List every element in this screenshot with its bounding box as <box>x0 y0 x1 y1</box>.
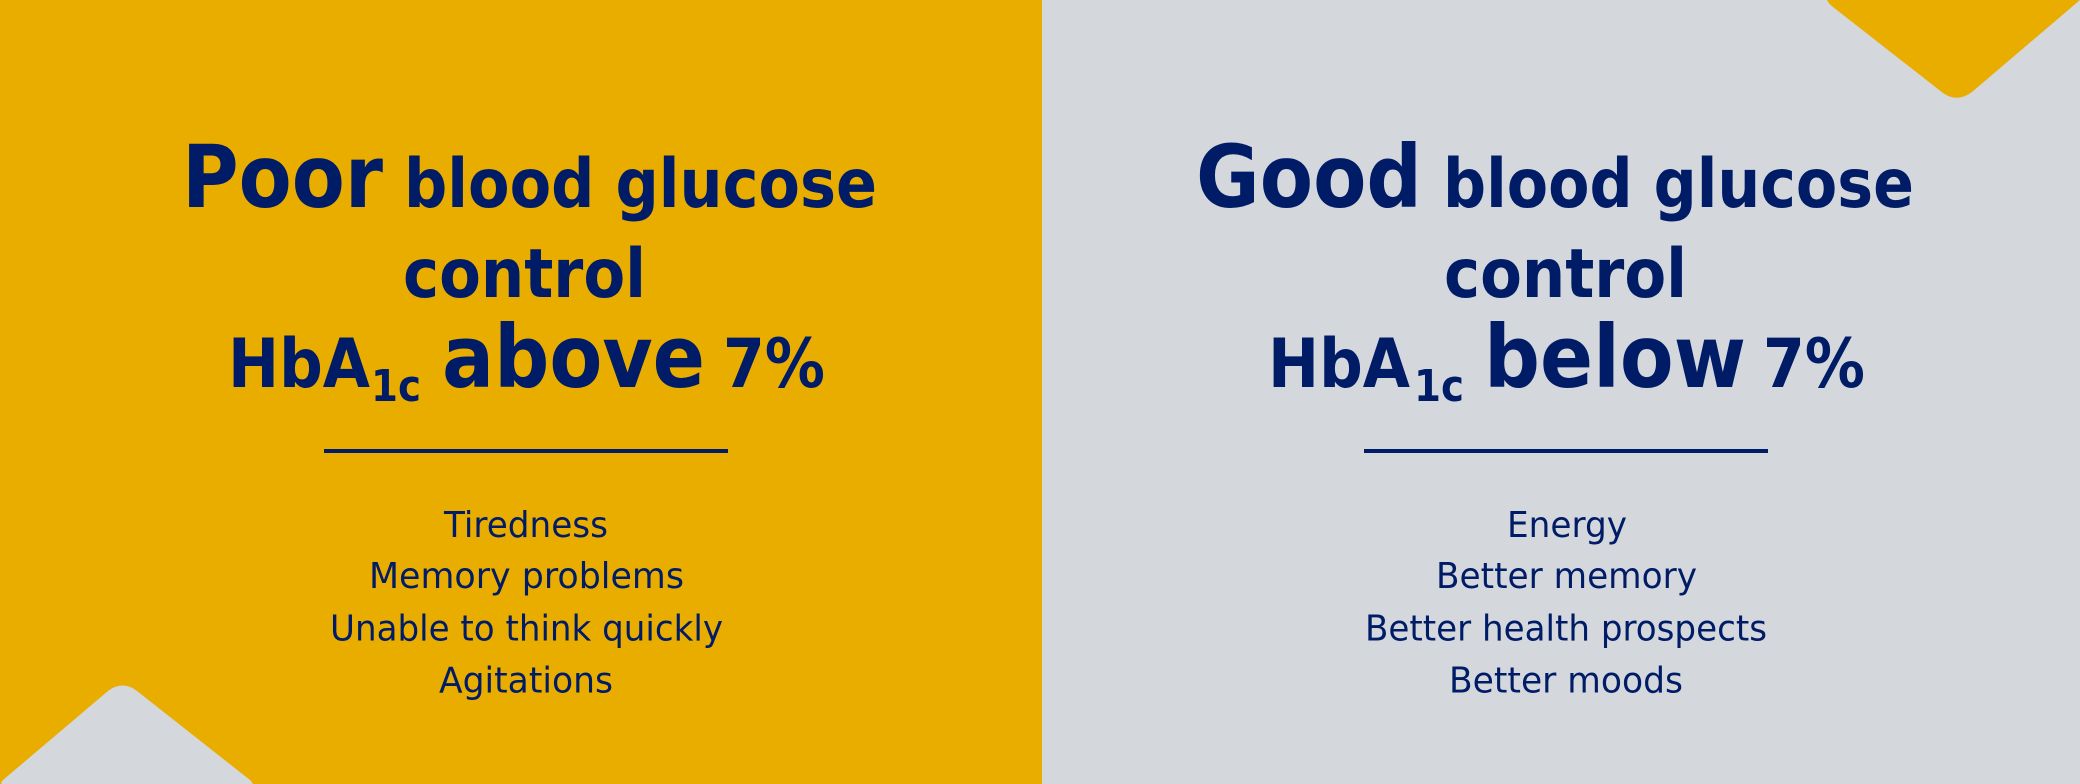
heading: good control: HbA <box>1268 324 1410 403</box>
benefit list: good control: Energy <box>1507 505 1627 546</box>
heading: poor control: control <box>403 234 646 313</box>
heading: poor control: above <box>442 308 705 408</box>
heading: good control: 1c <box>1414 361 1464 412</box>
panel background: gold <box>0 0 1042 784</box>
heading: poor control: 1c <box>371 361 421 412</box>
heading: good control <box>1196 128 1914 412</box>
heading: poor control: 7% <box>723 324 825 403</box>
symptom list: poor control: Memory problems <box>369 556 684 597</box>
heading: good control: 7% <box>1763 324 1865 403</box>
heading: good control: control <box>1444 234 1687 313</box>
heading: good control: blood glucose <box>1443 144 1914 223</box>
panel: poor blood glucose control <box>0 0 1042 784</box>
heading: poor control: Poor <box>182 128 383 228</box>
symptom list: poor control: Agitations <box>439 660 613 702</box>
symptom list: poor control: Unable to think quickly <box>330 608 723 650</box>
heading: poor control <box>182 128 877 412</box>
decorative corner shape: gold chevron <box>1827 0 2080 98</box>
panel background: grey <box>1042 0 2080 784</box>
heading: good control: below <box>1484 308 1746 408</box>
heading: good control: Good <box>1196 128 1422 228</box>
panel: good blood glucose control <box>1042 0 2080 784</box>
divider line <box>1364 449 1768 453</box>
heading: poor control: blood glucose <box>404 144 877 223</box>
benefit list: good control <box>1365 505 1767 702</box>
decorative corner shape: grey chevron <box>1 686 253 784</box>
divider line <box>324 449 728 453</box>
benefit list: good control: Better health prospects <box>1365 608 1767 650</box>
benefit list: good control: Better moods <box>1449 660 1683 702</box>
heading: poor control: HbA <box>228 324 370 403</box>
benefit list: good control: Better memory <box>1436 556 1697 597</box>
symptom list: poor control: Tiredness <box>443 505 608 546</box>
symptom list: poor control <box>330 505 723 702</box>
